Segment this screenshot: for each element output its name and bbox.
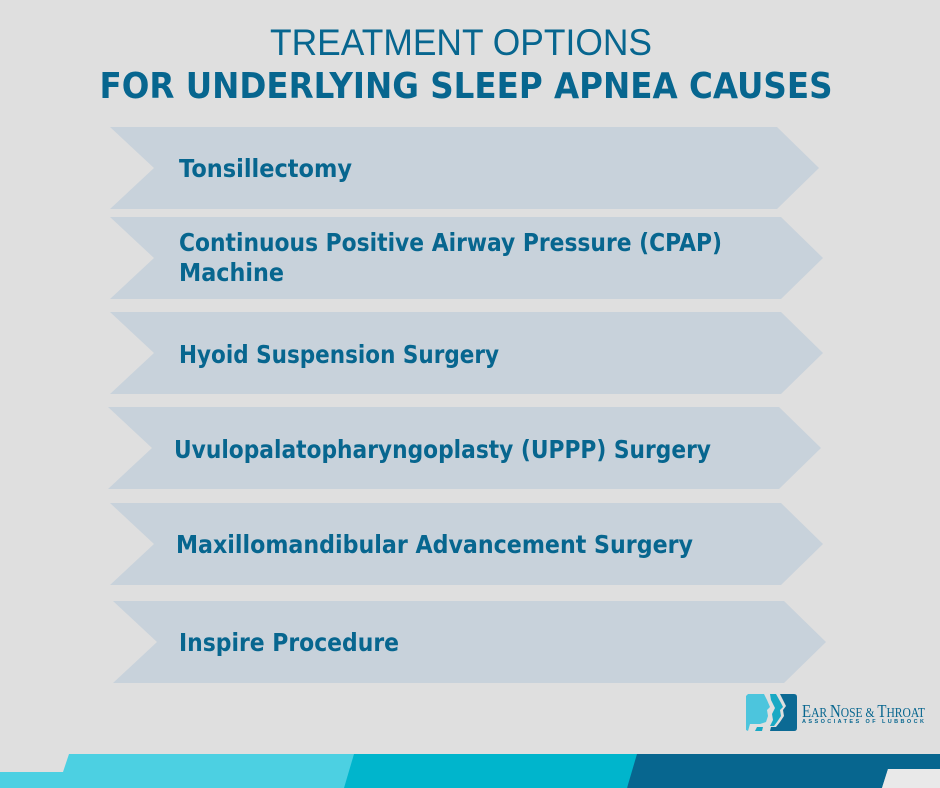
arrow banner: Maxillomandibular advancement surgery bbox=[110, 503, 823, 585]
arrow banner: Inspire procedure bbox=[113, 601, 826, 683]
footer colour band bbox=[0, 754, 940, 788]
arrow banner: UPPP surgery bbox=[108, 407, 821, 489]
arrow banner: CPAP machine: Continuous Positive Airway Pressure (CPAP) bbox=[179, 228, 722, 257]
icon: face profiles bbox=[746, 694, 797, 731]
arrow banner: Hyoid suspension surgery: Hyoid Suspension Surgery bbox=[179, 340, 499, 369]
arrow banner: CPAP machine: Machine bbox=[179, 258, 284, 287]
arrow banner: Tonsillectomy bbox=[110, 127, 819, 209]
logo wordmark: EAR NOSE & THROAT bbox=[802, 701, 925, 721]
title: FOR UNDERLYING SLEEP APNEA CAUSES bbox=[100, 66, 832, 107]
title: TREATMENT OPTIONS bbox=[270, 22, 652, 63]
logo tagline: ASSOCIATES OF LUBBOCK bbox=[802, 719, 924, 725]
arrow banner: Hyoid suspension surgery bbox=[110, 312, 823, 394]
arrow banner: Maxillomandibular advancement surgery: Maxillomandibular Advancement Surgery bbox=[176, 530, 693, 559]
arrow banner: UPPP surgery: Uvulopalatopharyngoplasty (UPPP) Surgery bbox=[174, 435, 711, 464]
logo: Ear Nose & Throat Associates of Lubbock bbox=[746, 694, 925, 731]
title bbox=[100, 22, 832, 107]
arrow banner: Inspire procedure: Inspire Procedure bbox=[179, 628, 399, 657]
arrow banner: CPAP machine bbox=[110, 217, 823, 299]
arrow banner: Tonsillectomy: Tonsillectomy bbox=[179, 154, 352, 183]
